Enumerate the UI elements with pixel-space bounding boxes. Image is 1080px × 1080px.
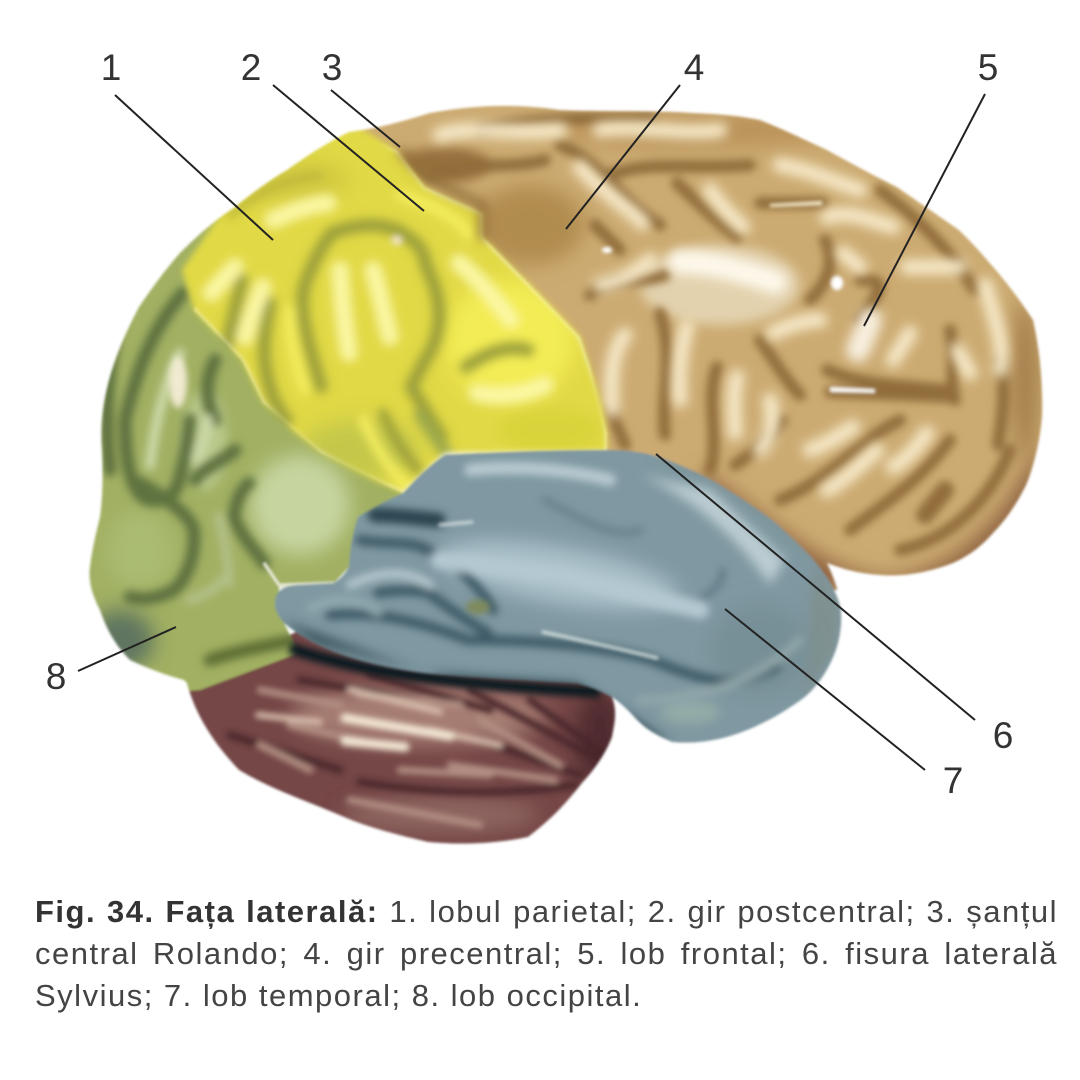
frontal lobe <box>330 90 1060 590</box>
caption: Sylvius; 7. lob temporal; 8. lob occipital. <box>35 978 642 1013</box>
number labels: 6 <box>993 715 1013 756</box>
caption: central Rolando; 4. gir precentral; 5. lob frontal; 6. fisura laterală <box>35 936 1058 971</box>
number labels: 7 <box>943 760 963 801</box>
number labels: 4 <box>684 47 704 88</box>
brain illustration <box>47 54 1044 846</box>
caption <box>35 894 1058 1013</box>
dark shadow over cerebellum <box>290 648 600 692</box>
number labels: 3 <box>322 47 342 88</box>
number labels: 5 <box>978 47 998 88</box>
parietal lobe <box>180 129 610 494</box>
number labels <box>46 47 1013 801</box>
number labels: 2 <box>241 47 261 88</box>
leader lines <box>78 85 985 770</box>
occipital lobe <box>88 216 404 692</box>
cerebellum <box>188 630 618 846</box>
number labels: 1 <box>101 47 121 88</box>
temporal lobe <box>260 440 860 750</box>
sulcus shadow along central sulcus <box>400 150 483 240</box>
number labels: 8 <box>46 656 66 697</box>
caption: Fig. 34. Fața laterală: 1. lobul parietal; 2. gir postcentral; 3. șanțul <box>35 894 1058 929</box>
